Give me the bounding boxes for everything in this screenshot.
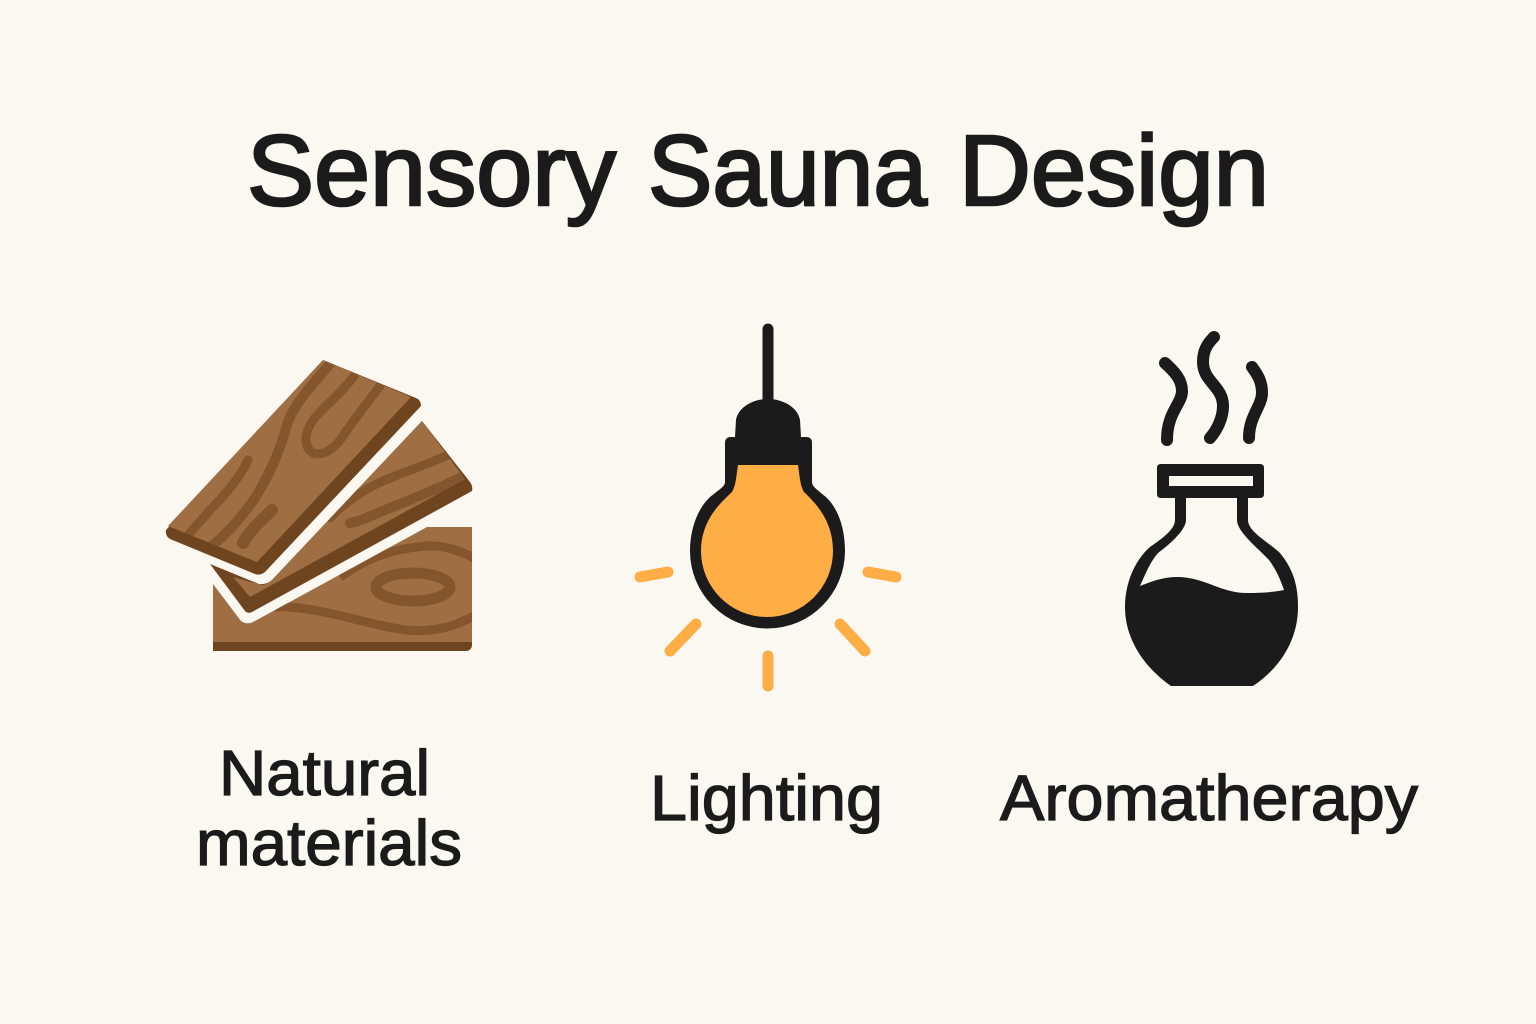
top plank (166, 360, 421, 575)
bulb glass (701, 465, 833, 617)
label: aromatherapy: Aromatherapy (1000, 762, 1418, 834)
label: lighting: Lighting (650, 762, 883, 834)
bulb cap and outline (690, 399, 845, 628)
bulb cord (762, 329, 774, 405)
flask stopper (1157, 464, 1264, 498)
title: Sauna (648, 115, 927, 227)
label: natural materials: materials (196, 807, 462, 879)
title (247, 115, 1269, 227)
bottom plank (213, 527, 474, 651)
light rays (640, 572, 896, 686)
title: Sensory (247, 115, 616, 227)
icon: wood planks (166, 360, 474, 651)
label: natural materials (196, 737, 462, 879)
steam (1165, 337, 1262, 440)
icon: light bulb (640, 329, 896, 686)
flask body (1125, 498, 1298, 686)
label: natural materials: Natural (219, 737, 430, 809)
flask interior above liquid (1140, 498, 1284, 593)
icon: aromatherapy flask (1125, 337, 1298, 686)
title: Design (959, 115, 1269, 227)
middle plank (210, 421, 472, 613)
